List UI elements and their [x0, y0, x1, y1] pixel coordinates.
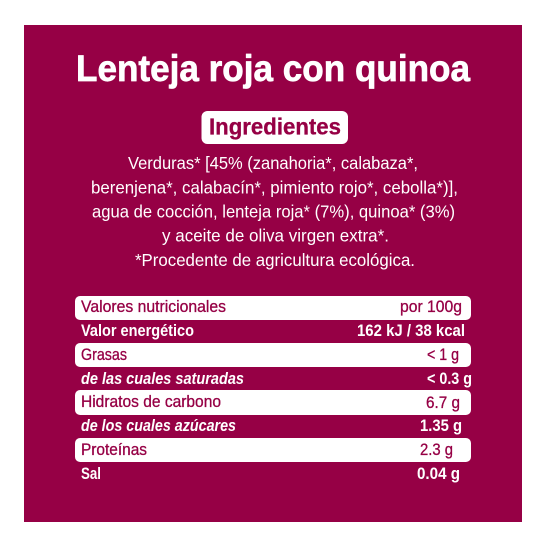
row: de las cuales saturadas: de las cuales saturadas	[81, 370, 244, 388]
row: Hidratos de carbono	[75, 390, 471, 415]
row: Proteínas	[75, 438, 471, 462]
text block: ingredients list: *Procedente de agricultura ecológica.	[135, 250, 415, 270]
row: Hidratos de carbono: Hidratos de carbono	[81, 393, 221, 411]
row: Valor energético: 162 kJ / 38 kcal	[357, 322, 465, 340]
row: Grasas	[75, 343, 471, 367]
text block: ingredients list: agua de cocción, lenteja roja* (7%), quinoa* (3%)	[92, 202, 455, 222]
text block: ingredients list: Verduras* [45% (zanahoria*, calabaza*,	[128, 153, 418, 173]
row: de los cuales azúcares: de los cuales azúcares	[81, 417, 236, 435]
row: Valores nutricionales: por 100g	[400, 298, 462, 316]
row: Valor energético: Valor energético	[81, 322, 194, 340]
row: Hidratos de carbono: 6.7 g	[426, 394, 460, 412]
text block: ingredients list: berenjena*, calabacín*, pimiento rojo*, cebolla*)],	[91, 178, 458, 198]
nutrition table	[75, 296, 472, 483]
row: Valores nutricionales: Valores nutricionales	[81, 298, 226, 316]
row: Sal: Sal	[81, 465, 101, 483]
row: de los cuales azúcares: 1.35 g	[420, 417, 462, 435]
row: Grasas: Grasas	[81, 346, 127, 364]
row: Valores nutricionales	[75, 296, 471, 320]
text block: ingredients list	[91, 153, 458, 270]
row: de las cuales saturadas	[81, 370, 472, 388]
row: Grasas: < 1 g	[427, 346, 459, 364]
row: Sal: 0.04 g	[417, 465, 460, 483]
row: Valor energético	[81, 322, 465, 340]
row: Proteínas: 2.3 g	[420, 441, 453, 459]
row: Sal	[81, 465, 460, 483]
heading: Ingredientes: Ingredientes	[209, 114, 341, 140]
title: Lenteja roja con quinoa	[76, 48, 470, 89]
text block: ingredients list: y aceite de oliva virgen extra*.	[162, 226, 389, 246]
row: de los cuales azúcares	[81, 417, 462, 435]
row: de las cuales saturadas: < 0.3 g	[427, 370, 472, 388]
row: Proteínas: Proteínas	[81, 441, 147, 459]
